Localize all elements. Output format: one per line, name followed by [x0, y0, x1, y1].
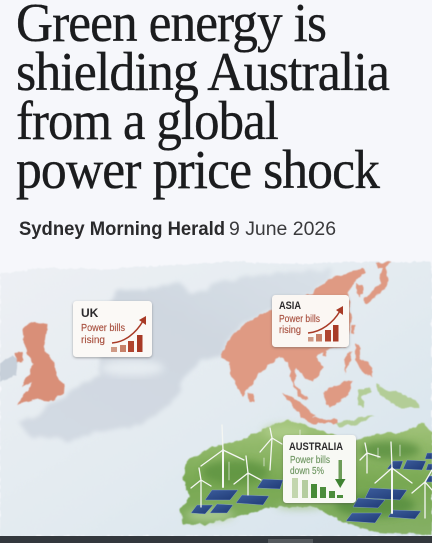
byline: Sydney Morning Herald	[19, 219, 225, 240]
uk rising arrow	[112, 316, 146, 343]
byline	[19, 219, 336, 240]
australia card: AUSTRALIA	[289, 441, 343, 453]
australia falling bars	[292, 478, 343, 498]
headline	[16, 0, 390, 200]
bottom cropped strip	[0, 536, 432, 543]
headline: from a global	[16, 90, 279, 151]
asia card	[272, 295, 349, 347]
uk rising bars	[111, 335, 142, 352]
solar panels	[191, 453, 432, 523]
australia card	[283, 435, 356, 503]
baltic pale patch	[100, 360, 164, 376]
grey landmass: Europe and northern Asia	[17, 270, 333, 440]
uk card	[73, 301, 152, 357]
headline: shielding Australia	[16, 41, 390, 102]
map panel	[0, 262, 432, 536]
uk card: Power bills	[81, 322, 125, 334]
australia landmass	[180, 420, 432, 535]
ocean background	[0, 262, 432, 536]
indonesia green islands	[335, 383, 419, 427]
ireland	[0, 355, 18, 383]
headline: power price shock	[16, 139, 380, 200]
asia card: Power bills	[279, 313, 320, 325]
asia card: ASIA	[279, 300, 301, 312]
byline: 9 June 2026	[229, 219, 336, 240]
australia card: down 5%	[290, 465, 324, 477]
asia rising arrow	[308, 306, 343, 333]
australia down arrow	[335, 460, 346, 488]
uk landmass	[15, 322, 65, 404]
uk card: rising	[81, 334, 105, 346]
uk card: UK	[81, 306, 99, 320]
asia card: rising	[279, 324, 301, 336]
wind turbines	[191, 425, 432, 518]
australia vegetation texture	[186, 425, 420, 521]
asia rising bars	[308, 325, 338, 342]
asia landmass	[221, 262, 391, 423]
australia card: Power bills	[290, 454, 330, 466]
